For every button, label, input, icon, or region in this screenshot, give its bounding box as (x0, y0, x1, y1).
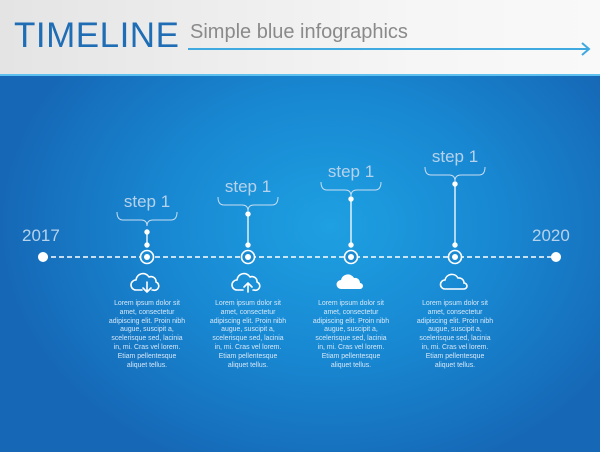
year 2017: 2017 (22, 226, 60, 245)
step 2 marker: step 1 (225, 177, 271, 196)
text block 4: Lorem ipsum dolor sit amet, consectetur adipiscing elit. Proin nibh augue, suscipit a, scelerisque sed, lacinia in, mi. Cras vel lorem. Etiam pellentesque aliquet tellus. (417, 300, 493, 369)
text block 3: Lorem ipsum dolor sit amet, consectetur adipiscing elit. Proin nibh augue, suscipit a, scelerisque sed, lacinia in, mi. Cras vel lorem. Etiam pellentesque aliquet tellus. (313, 300, 389, 369)
header band (0, 0, 600, 74)
header arrow (188, 42, 590, 56)
icon: cloud solid (336, 274, 363, 289)
title: TIMELINE (14, 16, 179, 55)
step 3 marker (321, 162, 381, 264)
icon: cloud upload (232, 274, 260, 292)
dashed line (38, 252, 561, 262)
step 1 marker (117, 192, 177, 264)
icon: cloud download (131, 274, 159, 292)
step 4 marker (425, 147, 485, 264)
step 2 marker (218, 177, 278, 264)
step 1 marker: step 1 (124, 192, 170, 211)
year 2020: 2020 (532, 226, 570, 245)
step 3 marker: step 1 (328, 162, 374, 181)
text block 2: Lorem ipsum dolor sit amet, consectetur adipiscing elit. Proin nibh augue, suscipit a, scelerisque sed, lacinia in, mi. Cras vel lorem. Etiam pellentesque aliquet tellus. (210, 300, 286, 369)
icon: cloud outline (441, 274, 467, 289)
text block 1: Lorem ipsum dolor sit amet, consectetur adipiscing elit. Proin nibh augue, suscipit a, scelerisque sed, lacinia in, mi. Cras vel lorem. Etiam pellentesque aliquet tellus. (109, 300, 185, 369)
subtitle: Simple blue infographics (190, 21, 408, 43)
step 4 marker: step 1 (432, 147, 478, 166)
